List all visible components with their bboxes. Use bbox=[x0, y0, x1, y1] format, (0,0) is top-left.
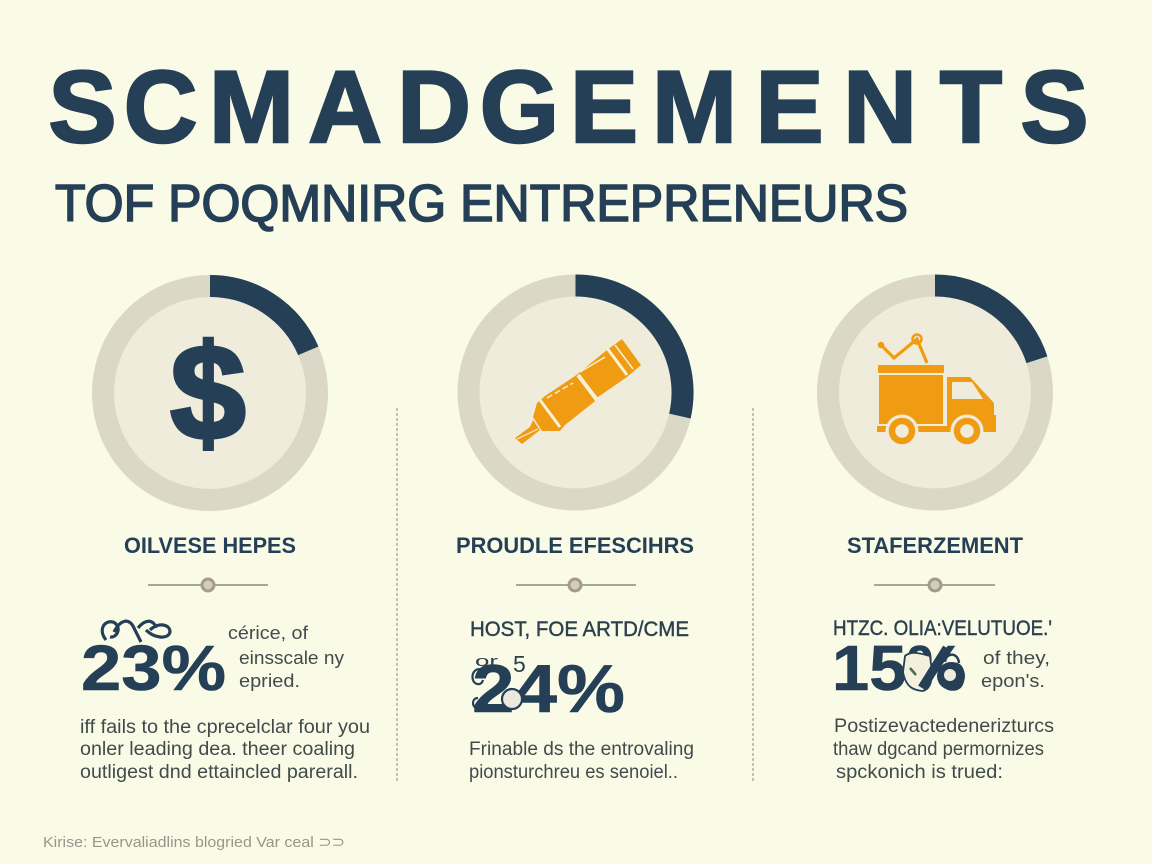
small numeral: 5 bbox=[513, 651, 526, 677]
body text: pionsturchreu es senoiel.. bbox=[469, 762, 678, 783]
panel: column two bbox=[456, 286, 694, 783]
side note: cérice, of bbox=[228, 623, 309, 643]
panel: column three bbox=[828, 286, 1054, 783]
donut chart with dollar icon bbox=[103, 286, 317, 500]
donut chart with truck icon bbox=[828, 286, 1042, 500]
ornament bbox=[102, 621, 170, 642]
side note bbox=[981, 648, 1050, 691]
side note: of they, bbox=[983, 648, 1050, 668]
icon: truck bbox=[877, 334, 996, 448]
side note: einsscale ny bbox=[239, 648, 344, 668]
column heading: OILVESE HEPES bbox=[124, 533, 296, 558]
statistic: 15% bbox=[832, 632, 966, 704]
footer note: Kirise: Evervaliadlins blogried Var ceal ⊃⊃ bbox=[43, 834, 345, 851]
body text: thaw dgcand permornizes bbox=[833, 739, 1044, 760]
icon: marker bbox=[515, 339, 641, 444]
donut chart with marker icon bbox=[468, 286, 683, 500]
divider with dot bbox=[874, 579, 995, 591]
panel: column one bbox=[80, 286, 370, 783]
icon: dollar: $ bbox=[170, 317, 246, 468]
body text: Postizevactedenerizturcs bbox=[834, 716, 1054, 737]
body text: outligest dnd ettaincled parerall. bbox=[80, 762, 358, 783]
ornament: shield and lock on percent sign bbox=[903, 648, 965, 691]
body text bbox=[469, 739, 694, 783]
subheading: HOST, FOE ARTD/CME bbox=[470, 618, 689, 641]
statistic: 23% bbox=[81, 632, 226, 704]
body text: iff fails to the cprecelclar four you bbox=[80, 717, 370, 738]
divider with dot bbox=[148, 579, 268, 591]
statistic: 24% bbox=[472, 651, 625, 727]
side note: epried. bbox=[239, 671, 300, 691]
body text: Frinable ds the entrovaling bbox=[469, 739, 694, 760]
ornament on numeral bbox=[472, 669, 522, 709]
column heading: PROUDLE EFESCIHRS bbox=[456, 533, 694, 558]
divider with dot bbox=[516, 579, 636, 591]
subheading: HTZC. OLIA:VELUTUOE.' bbox=[833, 617, 1052, 640]
small note: or bbox=[475, 653, 498, 670]
subtitle: TOF POQMNIRG ENTREPRENEURS bbox=[55, 175, 908, 233]
body text: onler leading dea. theer coaling bbox=[80, 739, 355, 760]
body text: spckonich is trued: bbox=[836, 762, 1003, 783]
title: SCMADGEMENTS bbox=[48, 50, 1089, 164]
side note bbox=[228, 623, 344, 691]
body text bbox=[80, 717, 370, 783]
column dividers bbox=[397, 408, 753, 783]
body text bbox=[833, 716, 1054, 783]
side note: epon's. bbox=[981, 671, 1045, 691]
column heading: STAFERZEMENT bbox=[847, 533, 1024, 558]
